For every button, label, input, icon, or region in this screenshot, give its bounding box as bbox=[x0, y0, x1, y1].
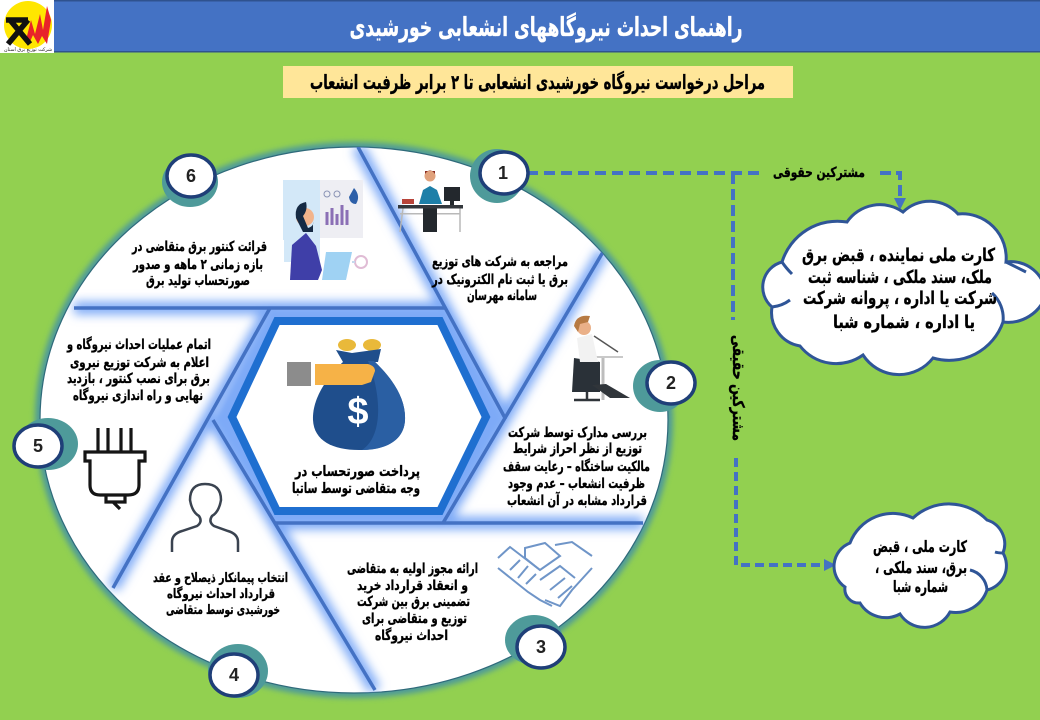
badge 3 bbox=[505, 615, 565, 668]
step text: برق برای نصب کنتور ، بازدید bbox=[67, 371, 210, 387]
step text: بررسی مدارک توسط شرکت bbox=[508, 425, 647, 441]
icon: man at desk bbox=[398, 170, 463, 232]
header bar bbox=[54, 0, 1040, 52]
cloud text: برق، سند ملکی ، bbox=[875, 558, 967, 577]
step 6 bbox=[131, 155, 367, 289]
step text: اعلام به شرکت توزیع نیروی bbox=[70, 355, 209, 371]
badge 5 bbox=[14, 418, 78, 470]
logo bbox=[0, 0, 54, 53]
logo: شرکت توزیع برق استان bbox=[4, 47, 52, 53]
step text: بازه زمانی ۲ ماهه و صدور bbox=[132, 257, 263, 273]
connector: natural subscribers bbox=[733, 173, 836, 571]
icon: person outline bbox=[172, 484, 238, 552]
badge 4 bbox=[208, 644, 268, 698]
step text: ارائه مجوز اولیه به متقاضی bbox=[347, 561, 478, 577]
subtitle banner: مراحل درخواست نیروگاه خورشیدی انشعابی تا ۲ برابر ظرفیت انشعاب bbox=[310, 70, 765, 94]
step 2 bbox=[503, 316, 695, 509]
step text: توزیع و متقاضی برای bbox=[362, 611, 467, 627]
icon: power plug bbox=[85, 428, 145, 509]
step text bbox=[503, 425, 650, 509]
icon: analyst with dashboard bbox=[283, 180, 367, 280]
step text: اتمام عملیات احداث نیروگاه و bbox=[66, 336, 211, 353]
step text bbox=[347, 561, 478, 644]
step 5 bbox=[14, 336, 211, 509]
connector: legal subscribers bbox=[527, 173, 906, 210]
step 1 bbox=[398, 149, 568, 304]
step text: و انعقاد قرارداد خرید bbox=[357, 578, 468, 594]
step text bbox=[431, 254, 568, 304]
title: راهنمای احداث نیروگاههای انشعابی خورشیدی bbox=[350, 12, 742, 43]
hexagon text bbox=[292, 464, 420, 497]
step text: مالکیت ساختگاه – رعایت سقف bbox=[503, 458, 650, 475]
wheel rim glow bbox=[35, 142, 673, 698]
central hexagon bbox=[232, 321, 486, 511]
step text: قرارداد احداث نیروگاه bbox=[167, 586, 275, 602]
step 3 bbox=[347, 542, 592, 668]
cloud text: کارت ملی ، قبض bbox=[873, 537, 967, 556]
badge 6: 6 bbox=[186, 166, 196, 186]
step text: سامانه مهرسان bbox=[467, 288, 537, 304]
icon: man on phone bbox=[572, 316, 630, 400]
step text: تضمینی برق بین شرکت bbox=[357, 594, 470, 610]
step text: صورتحساب تولید برق bbox=[146, 273, 250, 289]
step text: برق یا ثبت نام الکترونیک در bbox=[431, 272, 568, 288]
step text: مراجعه به شرکت های توزیع bbox=[432, 254, 568, 270]
step text: ظرفیت انشعاب – عدم وجود bbox=[508, 476, 645, 492]
process wheel bbox=[14, 142, 695, 698]
label: legal subscribers: مشترکین حقوقی bbox=[773, 165, 865, 181]
cloud text: یا اداره ، شماره شبا bbox=[833, 312, 975, 333]
wheel disc bbox=[40, 147, 668, 693]
step text: توزیع از نظر احراز شرایط bbox=[513, 441, 642, 457]
icon: handshake bbox=[498, 542, 592, 606]
step text: نهایی و راه اندازی نیروگاه bbox=[73, 387, 203, 404]
step text: احداث نیروگاه bbox=[375, 627, 448, 644]
hexagon text: وجه متقاضی توسط ساتبا bbox=[292, 481, 420, 497]
step text: انتخاب پیمانکار ذیصلاح و عقد bbox=[153, 571, 288, 586]
step text: خورشیدی توسط متقاضی bbox=[166, 603, 280, 618]
cloud text: شماره شبا bbox=[893, 577, 948, 596]
badge 4: 4 bbox=[229, 665, 239, 685]
cloud: legal documents bbox=[763, 201, 1040, 375]
hexagon text: پرداخت صورتحساب در bbox=[294, 464, 420, 480]
step 4 bbox=[153, 484, 288, 698]
badge 3: 3 bbox=[536, 637, 546, 657]
icon: money bag and hand: $ bbox=[347, 391, 369, 433]
step text bbox=[153, 571, 288, 618]
badge 5: 5 bbox=[33, 436, 43, 456]
step text bbox=[66, 336, 211, 404]
badge 1 bbox=[470, 149, 528, 203]
step text: قرارداد مشابه در آن انشعاب bbox=[507, 491, 647, 509]
badge 2: 2 bbox=[666, 373, 676, 393]
subtitle banner bbox=[283, 66, 793, 98]
icon: money bag and hand bbox=[287, 339, 405, 450]
badge 2 bbox=[633, 360, 695, 412]
label: natural subscribers: مشترکین حقیقی bbox=[729, 335, 748, 441]
badge 6 bbox=[162, 155, 218, 207]
step text bbox=[131, 239, 267, 289]
cloud: natural documents bbox=[834, 504, 1006, 627]
cloud text bbox=[873, 537, 967, 596]
badge 1: 1 bbox=[498, 163, 508, 183]
step text: قرائت کنتور برق متقاضی در bbox=[131, 239, 267, 255]
cloud text bbox=[802, 245, 997, 333]
divider lines bbox=[74, 147, 643, 690]
